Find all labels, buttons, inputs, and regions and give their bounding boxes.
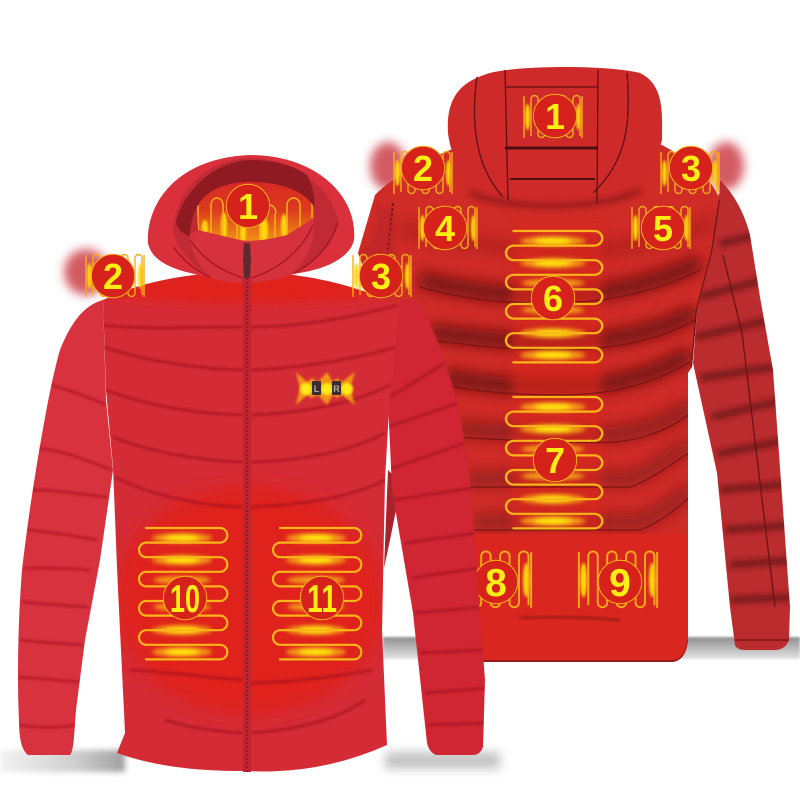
front quilting folds xyxy=(103,305,398,733)
front heating panel 1 label: 1 xyxy=(238,186,258,227)
back heating panel 2 xyxy=(394,146,452,194)
front heating panel 2 xyxy=(86,254,144,298)
back jacket xyxy=(350,67,800,670)
chest LR control badge xyxy=(296,372,355,405)
back heating panel 2: 2 xyxy=(413,148,433,189)
hood inner lining xyxy=(173,158,338,283)
front body xyxy=(97,265,405,780)
front lower heat area xyxy=(115,485,385,715)
shoulder heat glows xyxy=(64,142,744,295)
hood outer xyxy=(148,155,354,282)
back heating panel 9: 9 xyxy=(609,562,631,605)
zipper xyxy=(243,243,251,772)
front heating panel 3 xyxy=(353,254,411,298)
front heating panel 10 xyxy=(139,528,227,659)
hood heat panel 1 xyxy=(196,182,315,244)
back quilt seams xyxy=(420,270,700,530)
front heating panel 1 label xyxy=(226,184,270,228)
back heating panel 7: 7 xyxy=(545,440,565,481)
back heating panel 8: 8 xyxy=(485,562,507,605)
back body xyxy=(350,140,730,670)
front heating panel 3: 3 xyxy=(371,256,391,297)
back heating panel 1 xyxy=(524,94,582,138)
back hood xyxy=(448,67,662,209)
back heating panel 6: 6 xyxy=(543,278,563,319)
collar xyxy=(190,218,314,283)
front right sleeve xyxy=(388,300,485,755)
back hem edge xyxy=(483,640,688,661)
back left edge sliver xyxy=(384,470,398,568)
back heating panel 4 xyxy=(419,206,477,250)
back heating panel 8 xyxy=(476,550,532,608)
back heating panel 6 xyxy=(506,231,602,362)
back centre heat xyxy=(512,225,602,535)
chest LR control badge: L xyxy=(314,384,320,394)
hood edge folds xyxy=(173,222,338,278)
front heating panel 11: 11 xyxy=(307,578,337,621)
back quilt shadows xyxy=(400,221,715,522)
back heating panel 7 xyxy=(506,397,602,528)
front shoulder heat xyxy=(97,272,397,304)
hood base shadow xyxy=(470,190,640,206)
back heating panel 3 xyxy=(661,146,719,194)
back heating panel 5 xyxy=(632,206,690,250)
back left armhole xyxy=(388,203,393,250)
zipper pull xyxy=(243,243,251,278)
front heating panel 11 xyxy=(273,528,361,659)
front jacket xyxy=(10,155,490,780)
armhole seam right xyxy=(692,200,720,367)
back heating panel 1: 1 xyxy=(545,96,565,137)
back heating panel 9 xyxy=(579,551,657,608)
front heating panel 2: 2 xyxy=(103,256,123,297)
floor shadows xyxy=(0,637,800,772)
front left sleeve xyxy=(18,300,113,755)
sleeve shading folds xyxy=(695,234,795,600)
back heating panel 5: 5 xyxy=(653,208,673,249)
back right sleeve xyxy=(693,180,790,650)
back hood panel folds xyxy=(505,148,598,179)
front heating panel 10: 10 xyxy=(170,578,200,621)
back heating panel 3: 3 xyxy=(681,148,701,189)
chest LR control badge: R xyxy=(333,384,340,394)
back heating panel 4: 4 xyxy=(435,208,455,249)
back hem heat xyxy=(470,534,688,659)
hood dark lining xyxy=(176,160,315,236)
back hood seams xyxy=(474,70,628,203)
